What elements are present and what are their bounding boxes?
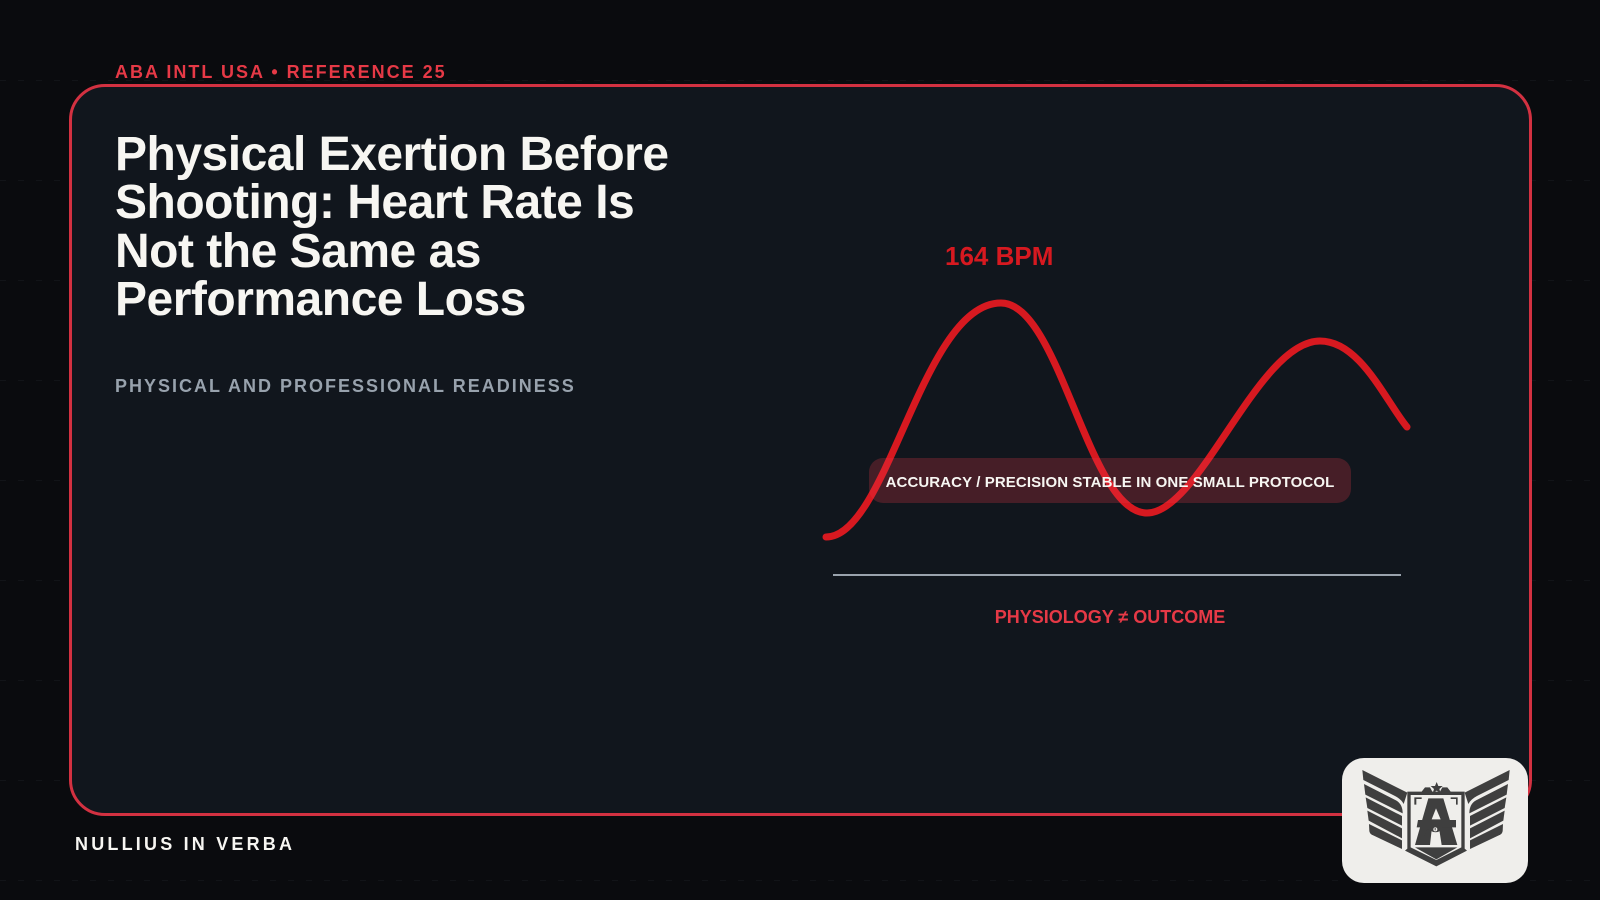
title: Not the Same as [115, 225, 481, 278]
title: Physical Exertion Before [115, 128, 669, 181]
callout text: ACCURACY / PRECISION STABLE IN ONE SMALL PROTOCOL [886, 474, 1334, 491]
chart baseline [833, 574, 1401, 576]
eyebrow label: ABA INTL USA • REFERENCE 25 [115, 62, 447, 82]
title: Shooting: Heart Rate Is [115, 176, 634, 229]
callout: accuracy note [869, 458, 1351, 503]
logo badge [1342, 758, 1528, 883]
title: Performance Loss [115, 273, 526, 326]
title [115, 128, 669, 326]
panel: main card [69, 84, 1532, 816]
footer motto: NULLIUS IN VERBA [75, 834, 295, 854]
subtitle: PHYSICAL AND PROFESSIONAL READINESS [115, 376, 576, 396]
heart rate peak label: 164 BPM [945, 241, 1053, 271]
caption: PHYSIOLOGY ≠ OUTCOME [995, 607, 1225, 627]
icon: winged shield emblem [1362, 770, 1510, 866]
